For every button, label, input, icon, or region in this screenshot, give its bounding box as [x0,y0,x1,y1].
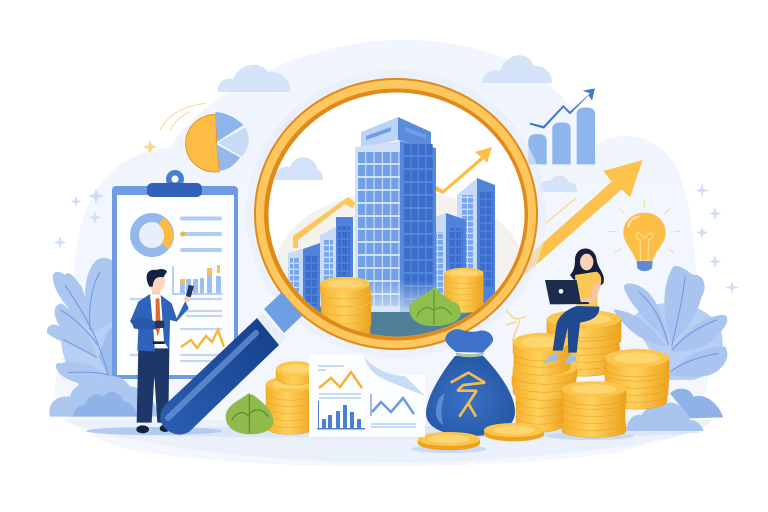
ferrule [264,292,302,333]
clipboard [112,170,238,379]
text lines [182,218,220,250]
shirt [575,272,601,307]
lens contents [275,117,525,350]
near coin stack [320,277,371,340]
leaves [613,266,727,380]
ground shadow [100,426,700,438]
tower front windows [358,152,400,307]
woman with laptop [544,249,604,364]
crown details [366,127,426,140]
small building 2 [320,217,353,300]
laptop [545,280,589,304]
mid text lines [130,299,222,361]
left shoe [544,354,558,363]
arm [580,280,601,303]
ring highlight [256,80,536,348]
paper sheet [309,355,425,437]
jacket right [161,295,189,350]
coin shadow right [546,432,634,440]
face [580,254,593,270]
line chart on clipboard [181,330,224,348]
phone hand [184,296,190,302]
stack of coins: right [605,349,669,409]
right shoe [566,356,576,364]
sparks near woman [506,310,526,342]
line chart: blue [372,398,414,414]
cloud in lens [275,157,323,180]
filament [636,233,653,261]
tower crown side [398,117,431,148]
loose coin: left [418,432,480,450]
cloud: top left [218,65,290,92]
bag tie [456,352,483,357]
belt [153,341,165,344]
plant: left [47,258,115,387]
chart document [309,355,425,437]
veins [638,277,718,372]
ferrule band [257,312,286,344]
ring inner edge [264,88,528,340]
clip hole [172,176,178,182]
cloud: right small [537,175,577,192]
right lens arrow [436,147,492,194]
leaves [47,258,115,387]
front bush [627,402,703,431]
chart axis [370,394,372,416]
tower crown front [361,117,398,148]
stack of coins: front [562,381,626,438]
line chart: orange [319,372,362,388]
neck [152,287,160,297]
ring of clip [166,170,184,188]
stack of coins: woman's seat [547,310,621,376]
coin shadow left [411,445,487,453]
yellow slice [186,115,219,172]
tower base fade [370,282,436,312]
illustration canvas [46,40,738,466]
pale hill [276,194,520,336]
left coin stack [266,361,316,434]
magnifier handle [160,292,302,435]
sparkles right [694,183,738,294]
donut chart [134,218,170,252]
bag shape [226,393,273,434]
tower front [355,141,400,312]
right shoe [160,425,170,432]
cloud: behind lens [277,106,344,133]
inner bush [73,392,137,417]
man shadow [86,427,222,435]
outer bush [49,376,158,417]
left lens arrow [293,197,356,248]
back bush [670,389,723,418]
plant: right [613,266,727,431]
handle highlight [168,333,256,418]
clip [147,183,202,197]
jacket left [130,294,155,352]
main tower [355,117,436,312]
sparkles left [54,140,157,249]
blue slices [215,112,243,142]
money bag [426,329,515,436]
loose coin: right [484,423,544,441]
head [148,271,165,292]
paper [117,195,234,375]
arrow motion line [546,198,576,223]
stem veins [60,272,108,375]
bars [528,107,595,164]
ground [314,306,477,336]
bar chart: top right rising bars [528,88,595,164]
motion lines [160,103,206,130]
bush: left [49,376,158,417]
magnifying glass [246,70,546,358]
shirt [148,294,164,342]
jacket sleeve [131,317,157,329]
green bag: bottom [226,393,273,434]
bag body [426,356,515,436]
legs [553,306,599,353]
bulb glass [623,213,666,261]
far coin stack [444,268,484,313]
currency emblem [451,373,485,417]
stack of coins: center [512,333,577,432]
legs [137,348,169,423]
tie [156,298,161,337]
tower side windows [404,144,433,307]
small building 1 [288,243,320,310]
bulb highlight [628,217,638,227]
background blob [55,40,708,466]
heading lines [318,366,416,427]
green bag in lens [409,287,461,326]
far right building [457,178,495,310]
man with phone [130,269,194,433]
pie chart [160,103,249,172]
trend arrow [530,88,595,129]
left shoe [136,425,149,433]
bulb base [637,261,653,271]
page curl [364,356,425,396]
rays [608,200,681,253]
bullet [180,232,186,236]
light bulb [608,200,681,271]
bag shine [436,393,445,425]
mid right building [436,213,466,315]
hair [570,249,604,286]
big yellow arrow [490,160,643,297]
coffee cup [155,321,164,328]
tower side [400,141,436,312]
ground strip [62,420,712,463]
lens glass [268,92,524,336]
lens halo [246,70,546,358]
phone [186,285,194,297]
bar chart [317,401,365,430]
cloud: top right [482,55,552,83]
bag knot [445,329,493,353]
ring [254,78,538,350]
handle grip [160,318,279,435]
board [112,186,238,379]
veins [232,395,268,433]
bar chart on clipboard [173,265,223,294]
laptop logo [559,289,563,294]
hair [147,269,167,287]
